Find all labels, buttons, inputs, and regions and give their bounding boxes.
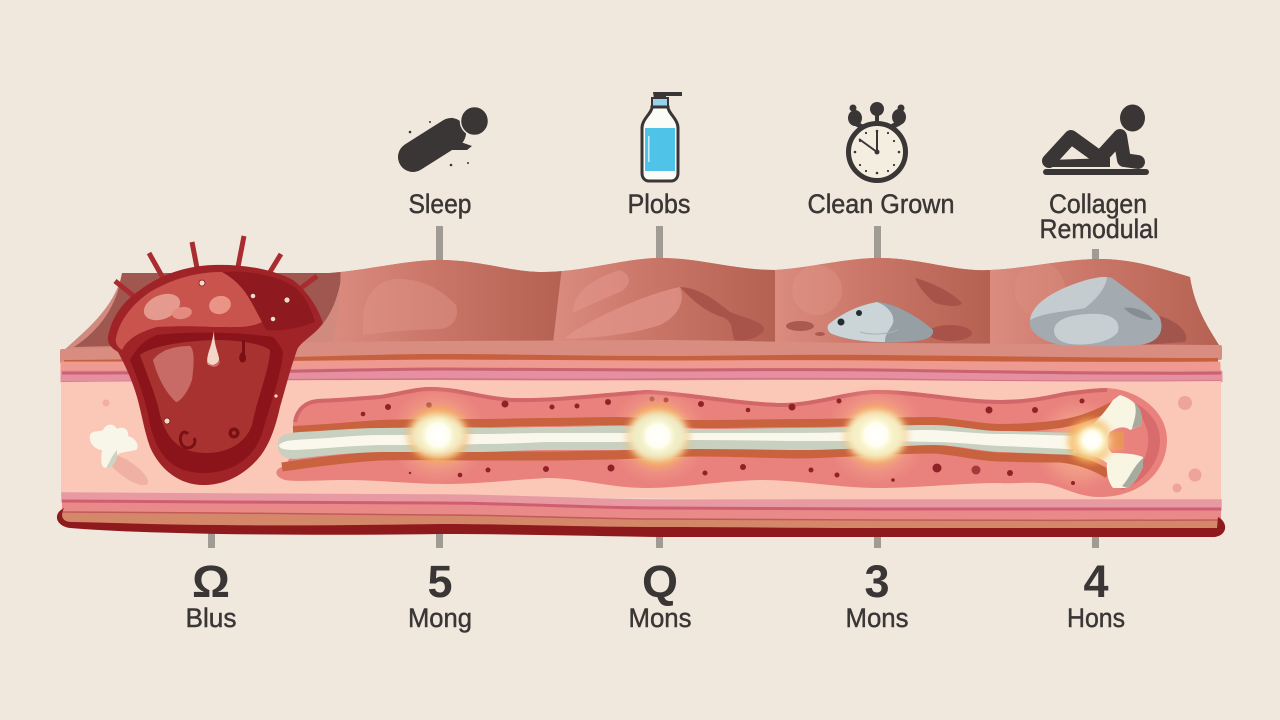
orange bands bbox=[293, 405, 1114, 430]
heading: Clean Grown: Clean Grown bbox=[808, 189, 954, 219]
bone shaft bbox=[278, 425, 1090, 459]
heading: Plobs: Plobs bbox=[628, 189, 690, 219]
number: 3 / Mons bbox=[846, 556, 908, 633]
number: omega / Blus bbox=[186, 556, 236, 633]
number: 3 / Mons: Mons bbox=[846, 603, 908, 633]
icon: alarm clock bbox=[848, 102, 906, 180]
number: omega / Blus: Ω bbox=[192, 556, 230, 607]
lower skin layers bbox=[57, 493, 1225, 537]
panel: dermis body bbox=[61, 380, 1221, 502]
panel: open wound bbox=[108, 236, 323, 485]
large rock bbox=[1030, 277, 1161, 346]
bone end bbox=[1073, 395, 1143, 488]
panel: top skin surface bbox=[65, 258, 1219, 349]
number: 5 / Mong: 5 bbox=[427, 556, 453, 607]
wound outer shape bbox=[108, 265, 323, 485]
upper skin layers bbox=[62, 342, 1221, 382]
number: Q / Mons bbox=[628, 556, 692, 633]
icon: water bottle bbox=[642, 92, 682, 181]
glow spots bbox=[408, 406, 1112, 466]
wound spikes bbox=[115, 236, 317, 298]
number: Q / Mons: Q bbox=[642, 556, 678, 607]
wound dome bbox=[116, 272, 262, 350]
drip bbox=[207, 331, 219, 365]
heading: Collagen Remodulal: Remodulal bbox=[1040, 214, 1158, 244]
number: 4 / Hons bbox=[1067, 556, 1125, 633]
number: 4 / Hons: 4 bbox=[1083, 556, 1109, 607]
number: Q / Mons: Mons bbox=[628, 603, 692, 633]
small bone fragment bbox=[90, 425, 152, 490]
number: 5 / Mong: Mong bbox=[408, 603, 472, 633]
icon: reclining figure bbox=[1043, 104, 1149, 175]
number: 5 / Mong bbox=[408, 556, 472, 633]
panel: tunnel with healing tissue bbox=[276, 383, 1167, 497]
scattered dots bbox=[361, 396, 1084, 485]
glow halos bbox=[388, 386, 488, 486]
wound inner ring bbox=[130, 333, 283, 473]
heading: Collagen Remodulal bbox=[1040, 189, 1158, 244]
heading: Sleep: Sleep bbox=[408, 189, 472, 219]
skin cross-section diagram bbox=[50, 236, 1230, 537]
timeline labels bbox=[186, 556, 1125, 633]
small rock bbox=[828, 302, 933, 343]
number: 3 / Mons: 3 bbox=[864, 556, 890, 607]
number: 4 / Hons: Hons bbox=[1067, 603, 1125, 633]
heading: Collagen Remodulal: Collagen bbox=[1049, 189, 1147, 219]
number: omega / Blus: Blus bbox=[186, 603, 236, 633]
connector ticks bbox=[208, 226, 1099, 548]
icon: sleeping figure bbox=[409, 106, 488, 166]
wound inner fill bbox=[140, 340, 270, 453]
